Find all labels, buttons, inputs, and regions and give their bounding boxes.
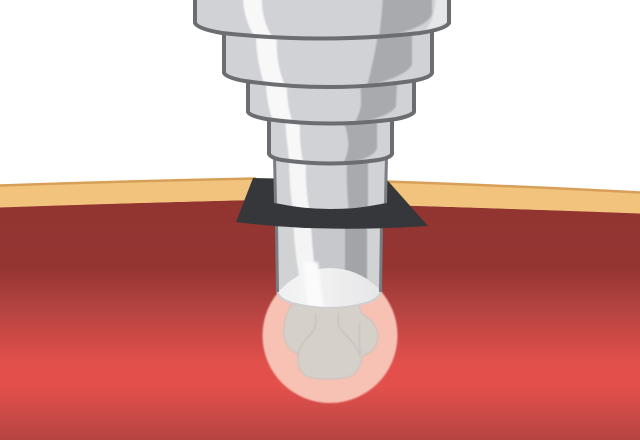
second step: shadow xyxy=(367,34,412,86)
lower cylinder: shadow xyxy=(344,228,368,279)
lower cylinder: tip rim xyxy=(278,292,380,308)
top step: outline xyxy=(195,0,449,38)
tissue: muscle layer xyxy=(0,200,640,440)
instrument body: second step xyxy=(224,30,432,90)
fourth step: outline xyxy=(269,118,392,164)
fourth step: shadow xyxy=(344,123,378,161)
fourth step: highlight xyxy=(284,123,304,160)
top step: highlight xyxy=(242,0,272,35)
lower cylinder inside tissue xyxy=(275,226,383,307)
third step: outline xyxy=(248,80,414,124)
tissue: left skin upper edge xyxy=(0,178,256,186)
third step: highlight xyxy=(266,86,292,120)
second step: highlight xyxy=(256,38,284,84)
top step: right light edge xyxy=(425,0,447,31)
lower cylinder: outlines xyxy=(276,222,382,292)
dark collar / port flange xyxy=(236,178,428,229)
second step: outline xyxy=(224,30,432,87)
upper cylinder: shadow xyxy=(346,164,368,208)
tumor: grey tissue mass xyxy=(284,303,378,379)
tissue: right skin upper edge xyxy=(385,182,640,192)
lower cylinder: centre band xyxy=(312,228,344,269)
tissue: left skin band xyxy=(0,178,256,208)
tumor: inner folds xyxy=(298,313,361,356)
lower cylinder: highlight xyxy=(293,227,314,276)
upper cylinder: outlines xyxy=(274,155,386,203)
lens highlight streak xyxy=(309,261,322,306)
top step: shadow xyxy=(379,0,432,38)
tissue: right skin band xyxy=(385,181,640,214)
instrument body: fourth step xyxy=(269,118,392,166)
third step: shadow xyxy=(355,85,398,121)
callout: magnified glow circle xyxy=(262,268,398,403)
upper cylinder through the collar xyxy=(273,160,388,209)
instrument body: third step xyxy=(248,80,414,126)
upper cylinder: highlight xyxy=(288,163,310,208)
instrument body: top step xyxy=(195,0,449,38)
lower cylinder: lens end seen through the glow xyxy=(278,268,380,307)
